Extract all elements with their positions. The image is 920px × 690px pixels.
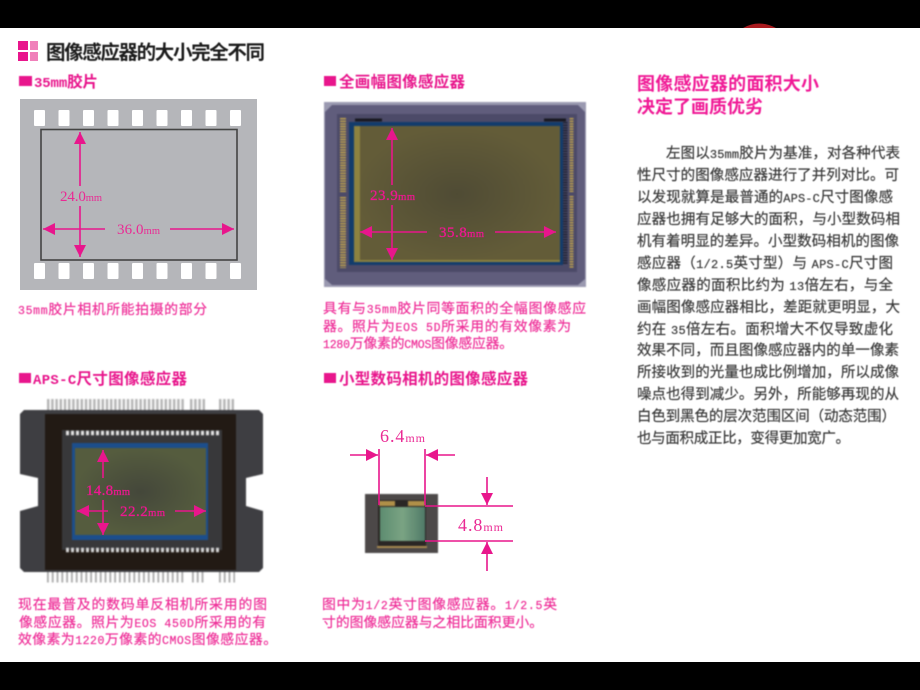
- body text: 所接收到的光量也成比例增加，所以成像: [637, 364, 900, 381]
- heading: explanation: 决定了画质优劣: [637, 96, 763, 117]
- body text: 画幅图像感应器相比，差距就更明显，大: [637, 298, 900, 316]
- panel: APS-C sensor: [18, 369, 277, 648]
- heading: explanation: 图像感应器的面积大小: [637, 73, 819, 94]
- dimension arrows: full-frame: [360, 128, 556, 260]
- caption: full-frame: 具有与35mm胶片同等面积的全幅图像感应: [323, 300, 586, 317]
- caption: film: 35mm胶片相机所能拍摄的部分: [18, 301, 207, 318]
- dimension label: 4.8mm: 4.8mm: [458, 515, 504, 535]
- body text: 感应器（1/2.5英寸型）与 APS-C尺寸图: [637, 254, 893, 272]
- dimension label: 35.8mm: 35.8mm: [439, 225, 484, 241]
- panel: explanation: [637, 73, 900, 447]
- caption: APS-C: 像感应器。照片为EOS 450D所采用的有: [19, 614, 266, 631]
- sensor photo: compact: [365, 494, 438, 553]
- panel: compact camera sensor: [322, 369, 557, 630]
- dimension arrows: film: [43, 132, 234, 257]
- title: 图像感应器的大小完全不同: [46, 41, 265, 64]
- heading: 35mm film: 35mm胶片: [34, 72, 98, 92]
- body text: 左图以35mm胶片为基准，对各种代表: [666, 145, 900, 162]
- top black band: [0, 0, 920, 28]
- dimension label: 6.4mm: 6.4mm: [380, 426, 426, 446]
- heading: compact: 小型数码相机的图像感应器: [339, 369, 528, 388]
- heading: full-frame: 全画幅图像感应器: [339, 72, 465, 91]
- body text: 噪点也得到减少。另外，所能够再现的从: [637, 386, 899, 403]
- caption: compact: 寸的图像感应器与之相比面积更小。: [322, 614, 543, 630]
- panel: 35mm film: [18, 72, 257, 318]
- heading: APS-C: APS-C尺寸图像感应器: [33, 369, 187, 389]
- body text: 以发现就算是最普通的APS-C尺寸图像感: [637, 189, 893, 206]
- body text: [637, 145, 900, 447]
- caption: full-frame: [323, 300, 586, 352]
- dimension label: 36.0mm: 36.0mm: [117, 222, 160, 238]
- body text: 效果不同，而且图像感应器内的单一像素: [637, 341, 899, 359]
- body text: 机有着明显的差异。小型数码相机的图像: [637, 233, 900, 250]
- caption: full-frame: 1280万像素的CMOS图像感应器。: [323, 335, 513, 352]
- body text: 白色到黑色的层次范围区间（动态范围）: [637, 408, 896, 425]
- film strip: [20, 99, 257, 290]
- body text: 应器也拥有足够大的面积，与小型数码相: [637, 210, 900, 228]
- caption: APS-C: 现在最普及的数码单反相机所采用的图: [18, 597, 267, 612]
- body text: 约在 35倍左右。面积增大不仅导致虚化: [637, 321, 893, 338]
- dimension label: 23.9mm: 23.9mm: [370, 188, 415, 204]
- caption: APS-C: [18, 597, 277, 648]
- icon: title squares: [18, 41, 38, 61]
- dimension label: 22.2mm: 22.2mm: [120, 504, 165, 520]
- bottom black band: [0, 662, 920, 690]
- caption: APS-C: 效像素为1220万像素的CMOS图像感应器。: [18, 631, 277, 648]
- dimension lines: compact: [350, 449, 513, 571]
- dimension arrows: APS-C: [77, 450, 206, 535]
- body text: 也与面积成正比，变得更加宽广。: [637, 430, 850, 447]
- panel: full-frame sensor: [323, 72, 586, 352]
- body text: 像感应器的面积比约为 13倍左右，与全: [637, 276, 894, 294]
- dimension label: 14.8mm: 14.8mm: [86, 483, 130, 499]
- caption: compact: [322, 596, 557, 630]
- body text: 性尺寸的图像感应器进行了并列对比。可: [637, 166, 899, 184]
- sensor photo: APS-C: [20, 404, 263, 577]
- heading: explanation: [637, 73, 819, 117]
- sensor photo: full-frame: [324, 102, 586, 287]
- dimension label: 24.0mm: 24.0mm: [60, 189, 102, 205]
- caption: compact: 图中为1/2英寸图像感应器。1/2.5英: [322, 596, 557, 613]
- caption: full-frame: 器。照片为EOS 5D所采用的有效像素为: [323, 319, 571, 335]
